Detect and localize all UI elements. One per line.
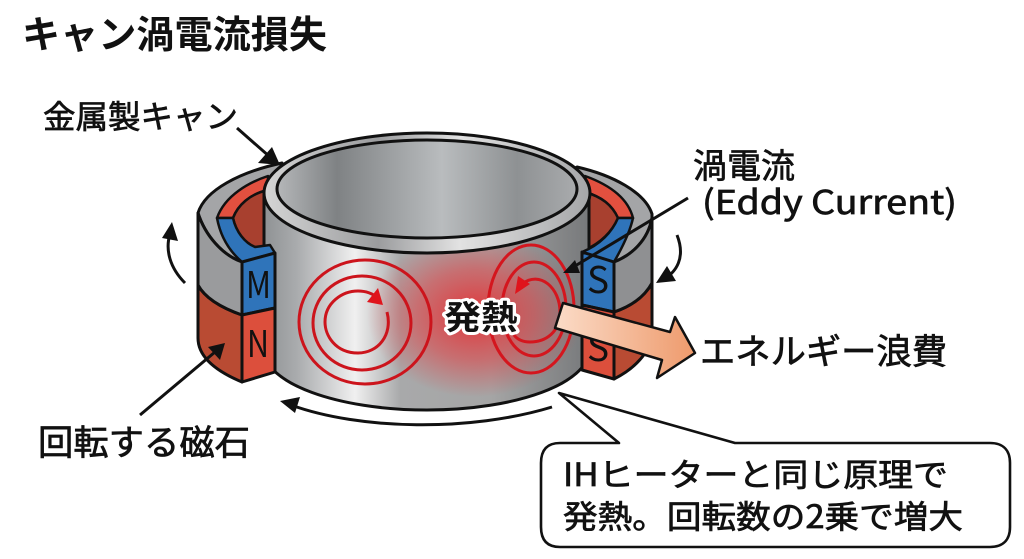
callout text line 2: 発熱。回転数の2乗で増大 — [563, 492, 963, 538]
right magnet lower red outer face — [614, 283, 652, 379]
M pole face: M — [246, 255, 271, 309]
right magnet blue top band — [582, 218, 633, 262]
rotation arrow: left magnet — [162, 222, 185, 283]
arrow: rotating magnet — [140, 343, 225, 415]
left magnet top surface — [198, 163, 282, 262]
eddy current left — [299, 260, 431, 384]
left magnet back — [198, 163, 282, 262]
right magnet front — [582, 218, 652, 379]
right magnet inner wall — [585, 192, 618, 250]
rotation arrow: right magnet — [656, 235, 680, 283]
callout — [541, 393, 1010, 547]
callout bubble — [541, 393, 1010, 547]
right magnet back — [568, 167, 652, 262]
label: heat generation: 発熱 — [444, 291, 518, 339]
arrow: eddy current — [563, 198, 688, 273]
right magnet top surface — [568, 167, 652, 262]
title: キャン渦電流損失 — [22, 4, 327, 59]
S pole face upper — [582, 250, 614, 312]
label: energy waste: エネルギー浪費 — [700, 324, 947, 375]
rotation arrow: bottom — [280, 397, 552, 425]
label: eddy current: (Eddy Current) — [702, 176, 957, 224]
can outer wall — [264, 193, 589, 410]
left magnet lower red outer face — [198, 285, 242, 382]
right magnet upper grey outer face — [614, 218, 652, 312]
eddy current right — [488, 245, 574, 373]
right magnet red top band — [585, 176, 633, 218]
S pole face upper: S — [587, 250, 609, 304]
N pole face: N — [247, 314, 269, 368]
callout text line 1: IHヒーターと同じ原理で — [563, 450, 948, 496]
label: eddy current — [693, 139, 957, 224]
metal can — [264, 133, 590, 410]
left magnet front — [198, 213, 275, 382]
can inner wall — [277, 140, 577, 238]
can rim — [264, 133, 590, 253]
left magnet blue top band — [217, 218, 275, 262]
heat glow — [372, 246, 572, 392]
label: rotating magnet: 回転する磁石 — [38, 415, 250, 466]
left magnet inner wall — [233, 190, 268, 250]
N pole face — [242, 308, 275, 382]
arrow: energy waste — [555, 303, 695, 378]
arrow: metal can — [237, 128, 280, 165]
label: eddy current: 渦電流 — [693, 139, 795, 188]
label: metal can: 金属製キャン — [43, 92, 238, 138]
left magnet red top band — [217, 176, 268, 218]
left magnet upper grey outer face — [198, 213, 242, 315]
S pole face lower: S — [587, 318, 609, 372]
S pole face lower — [582, 305, 614, 379]
